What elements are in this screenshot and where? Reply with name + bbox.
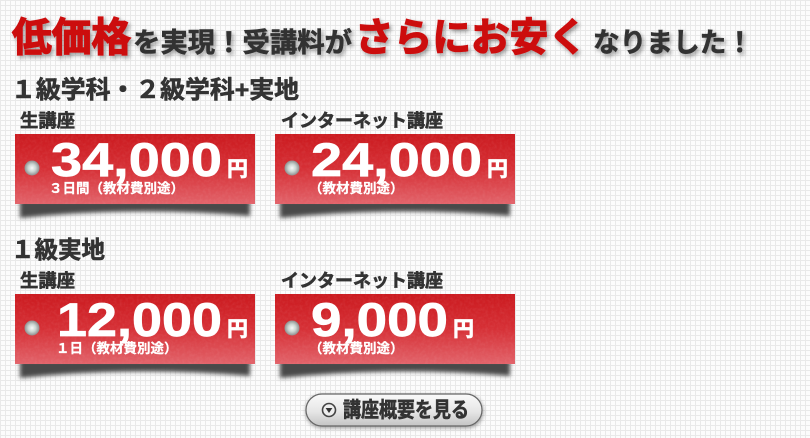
- label: internet course 2: インターネット講座: [281, 271, 443, 291]
- price tag: internet course 9,000: （教材費別途）: [309, 340, 404, 356]
- price tag: live course 34,000: [15, 133, 255, 218]
- price tag: live course 12,000: 円: [227, 318, 248, 341]
- price tag: live course 12,000: 12,000: [57, 293, 222, 346]
- price tag: live course 34,000: ３日間（教材費別途）: [49, 180, 184, 196]
- heading: course group 1: １級学科・２級学科+実地: [11, 76, 299, 104]
- title: さらにお安く: [355, 17, 587, 60]
- title: 低価格: [12, 16, 131, 60]
- price tag: live course 34,000: 34,000: [51, 133, 222, 186]
- price tag: internet course 9,000: [275, 293, 515, 378]
- heading: course group 2: １級実地: [11, 237, 105, 264]
- label: live course 1: 生講座: [20, 111, 75, 131]
- price tag: internet course 24,000: [275, 133, 515, 218]
- button: course overview: [306, 394, 483, 428]
- price tag: internet course 9,000: 9,000: [311, 293, 448, 346]
- label: live course 2: 生講座: [20, 271, 75, 291]
- title: を実現！受講料が: [133, 27, 352, 58]
- price tag: live course 34,000: 円: [227, 158, 248, 181]
- label: internet course 1: インターネット講座: [281, 111, 443, 131]
- price tag: internet course 24,000: 24,000: [311, 133, 482, 186]
- button: course overview: 講座概要を見る: [343, 399, 469, 422]
- price tag: internet course 24,000: （教材費別途）: [309, 180, 404, 196]
- price tag: internet course 24,000: 円: [487, 158, 508, 181]
- price tag: live course 12,000: [15, 293, 255, 378]
- title: なりました！: [593, 28, 753, 58]
- icon: down arrow in circle: [322, 404, 336, 416]
- title: [12, 16, 753, 60]
- price tag: live course 12,000: １日（教材費別途）: [56, 340, 178, 356]
- price tag: internet course 9,000: 円: [453, 318, 474, 341]
